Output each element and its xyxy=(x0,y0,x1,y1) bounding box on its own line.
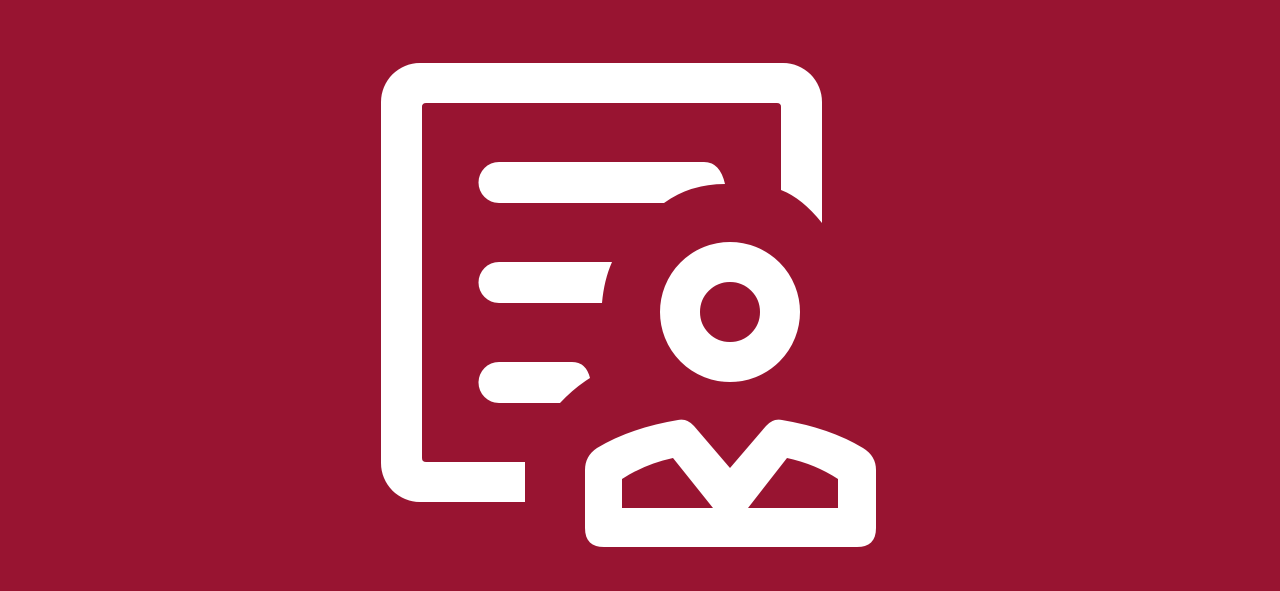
icon: middle text line xyxy=(478,262,612,303)
icon: top text line xyxy=(478,162,725,203)
icon: person shoulders xyxy=(585,420,876,547)
icon: bottom text line xyxy=(478,362,590,403)
icon: document outline xyxy=(381,63,822,502)
icon: person head xyxy=(680,262,780,362)
